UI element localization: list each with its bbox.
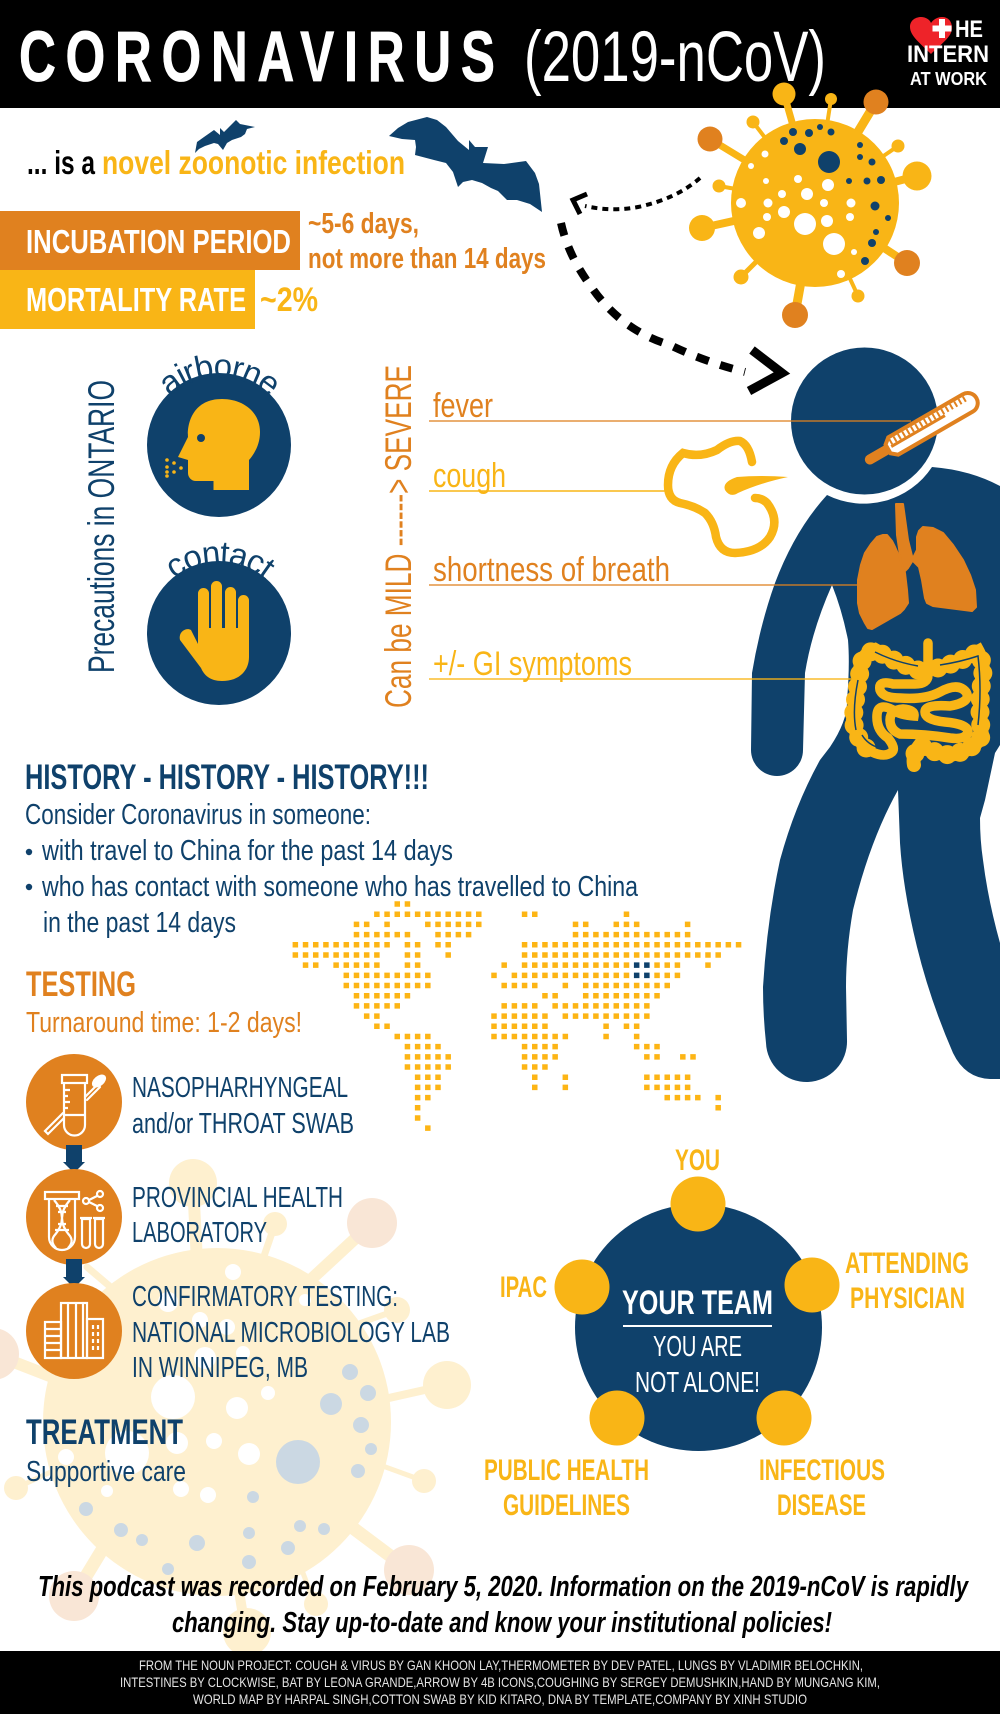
section: testing: Turnaround time: 1-2 days! (26, 1007, 302, 1039)
header band (0, 0, 1000, 108)
step 3: national lab: NATIONAL MICROBIOLOGY LAB (132, 1317, 450, 1349)
arrow: virus to bat (573, 178, 700, 214)
panel: your team: IPAC (500, 1271, 547, 1304)
section: testing (26, 965, 302, 1039)
section: testing: TESTING (26, 965, 136, 1004)
section: history: who has contact with someone who has travelled to China (41, 871, 639, 903)
panel: your team: YOUR TEAM (622, 1284, 773, 1322)
symptom: shortness of breath: shortness of breath (433, 551, 670, 589)
arrow: step 1 to step 2 (63, 1145, 85, 1173)
closing note (38, 1571, 969, 1639)
step 2: provincial lab: LABORATORY (132, 1217, 267, 1249)
mortality rate bar: MORTALITY RATE (26, 281, 246, 318)
symptom: GI symptoms: +/- GI symptoms (433, 645, 632, 683)
step 2: provincial lab: PROVINCIAL HEALTH (132, 1182, 343, 1214)
footer credits (0, 1651, 1000, 1714)
step 3: national lab: IN WINNIPEG, MB (132, 1352, 308, 1384)
panel: airborne precaution: airborne (162, 356, 277, 394)
step 2: provincial lab (26, 1169, 343, 1265)
icon: cough (668, 441, 788, 553)
panel: your team: NOT ALONE! (635, 1367, 760, 1399)
icon: large bat (389, 117, 542, 212)
title: (2019-nCoV) (524, 18, 826, 97)
panel: your team: YOU (675, 1144, 720, 1177)
logo: the intern at work: HE (955, 16, 983, 43)
icon: small bat (195, 120, 255, 153)
logo: the intern at work: INTERN (907, 41, 989, 68)
virus illustration (689, 82, 932, 328)
step 1: swab (26, 1054, 354, 1150)
panel: your team: GUIDELINES (503, 1489, 630, 1522)
panel: your team (484, 1144, 969, 1522)
panel: your team: DISEASE (777, 1489, 866, 1522)
precautions label: Precautions in ONTARIO (81, 380, 122, 673)
person figure (751, 348, 1000, 1082)
background virus watermark (0, 1159, 471, 1656)
step 3: national lab: CONFIRMATORY TESTING: (132, 1281, 398, 1313)
panel: contact precaution: contact (168, 542, 274, 578)
section: history: with travel to China for the past 14 days (41, 835, 453, 867)
incubation period bar (0, 211, 300, 270)
mortality value: ~2% (260, 281, 318, 319)
intro sentence (27, 144, 405, 181)
step 1: swab: NASOPHARHYNGEAL (132, 1072, 348, 1104)
mortality rate bar (0, 270, 255, 329)
panel: airborne precaution (147, 356, 291, 517)
title (19, 18, 826, 97)
incubation values: ~5-6 days, (308, 208, 419, 240)
logo: the intern at work: AT WORK (910, 69, 987, 89)
symptom: fever: fever (433, 387, 493, 425)
panel: your team: INFECTIOUS (759, 1454, 885, 1487)
arrow: step 2 to step 3 (63, 1259, 85, 1288)
panel: your team: PUBLIC HEALTH (484, 1454, 649, 1487)
icon: intestines (853, 643, 983, 765)
incubation values (308, 208, 546, 275)
severity scale label: Can be MILD ------> SEVERE (378, 365, 419, 708)
logo: the intern at work (907, 16, 989, 89)
symptom: cough: cough (433, 457, 506, 495)
step 3: national lab (26, 1281, 450, 1384)
section: treatment: Supportive care (26, 1456, 186, 1488)
incubation values: not more than 14 days (308, 243, 546, 275)
step 1: swab: and/or THROAT SWAB (132, 1108, 354, 1140)
section: treatment (26, 1413, 186, 1488)
section: treatment: TREATMENT (26, 1413, 183, 1452)
footer credits: WORLD MAP BY HARPAL SINGH,COTTON SWAB BY KID KITARO, DNA BY TEMPLATE,COMPANY BY XINH STUDIO (193, 1691, 807, 1707)
icon: lungs (858, 504, 976, 629)
incubation period bar: INCUBATION PERIOD (26, 223, 291, 260)
section: history: Consider Coronavirus in someone: (25, 799, 371, 831)
arrow: bat to person (561, 223, 782, 391)
icon: thermometer (861, 389, 981, 471)
title: CORONAVIRUS (19, 18, 495, 97)
world map (293, 904, 741, 1128)
section: history: HISTORY - HISTORY - HISTORY!!! (25, 758, 429, 797)
section: history: in the past 14 days (43, 907, 236, 939)
panel: contact precaution (147, 542, 291, 705)
section: history (25, 758, 639, 939)
intro sentence: novel zoonotic infection (102, 144, 405, 181)
intro sentence: ... is a (27, 144, 95, 181)
panel: your team: YOU ARE (653, 1331, 742, 1363)
